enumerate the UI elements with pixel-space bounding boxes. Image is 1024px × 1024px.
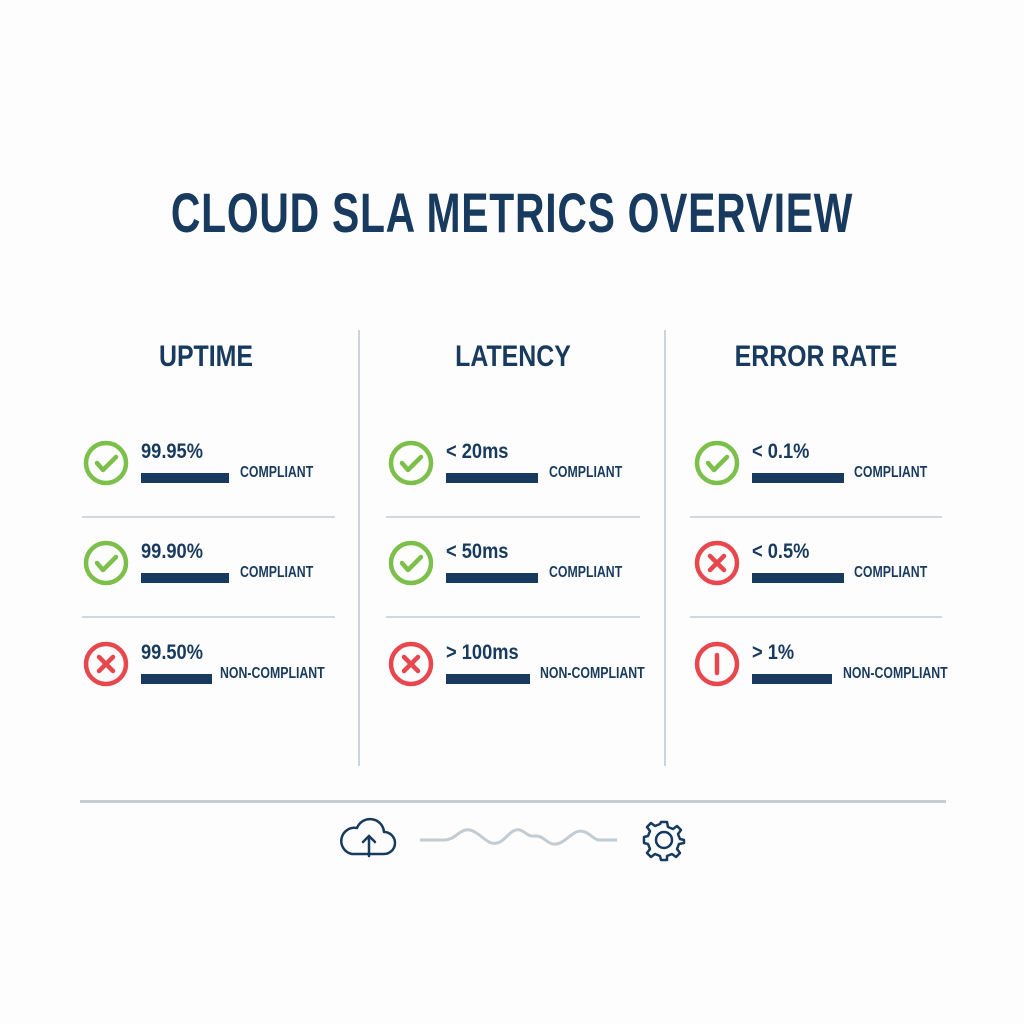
panel: uptime rows: COMPLIANT [240, 564, 313, 581]
panel: uptime rows: 99.50% [141, 641, 203, 664]
panel: latency rows [386, 440, 645, 684]
icons: uptime [86, 443, 126, 684]
panel: latency rows: NON-COMPLIANT [540, 665, 645, 682]
panel: error rate rows: NON-COMPLIANT [843, 665, 948, 682]
panel: error rate rows: < 0.5% [752, 540, 809, 563]
panel: error rate rows: COMPLIANT [854, 464, 927, 481]
icons: error rate [697, 443, 737, 684]
panel: latency rows: COMPLIANT [549, 464, 622, 481]
panel: error rate rows: < 0.1% [752, 440, 809, 463]
icons: latency [391, 443, 431, 684]
panel: uptime rows [82, 440, 335, 684]
panel: latency rows: COMPLIANT [549, 564, 622, 581]
heading: latency: LATENCY [455, 340, 571, 373]
panel: latency rows: > 100ms [446, 641, 519, 664]
panel: error rate rows [690, 440, 948, 684]
footer icons [341, 819, 684, 860]
title: CLOUD SLA METRICS OVERVIEW [171, 181, 853, 244]
panel: uptime rows: COMPLIANT [240, 464, 313, 481]
panel: error rate rows: > 1% [752, 641, 794, 664]
heading: error rate: ERROR RATE [735, 340, 897, 373]
panel: latency rows: < 50ms [446, 540, 508, 563]
heading: uptime: UPTIME [159, 340, 253, 373]
panel: uptime rows: NON-COMPLIANT [220, 665, 325, 682]
panel: error rate rows: COMPLIANT [854, 564, 927, 581]
panel: uptime rows: 99.90% [141, 540, 203, 563]
panel: uptime rows: 99.95% [141, 440, 203, 463]
panel: latency rows: < 20ms [446, 440, 508, 463]
